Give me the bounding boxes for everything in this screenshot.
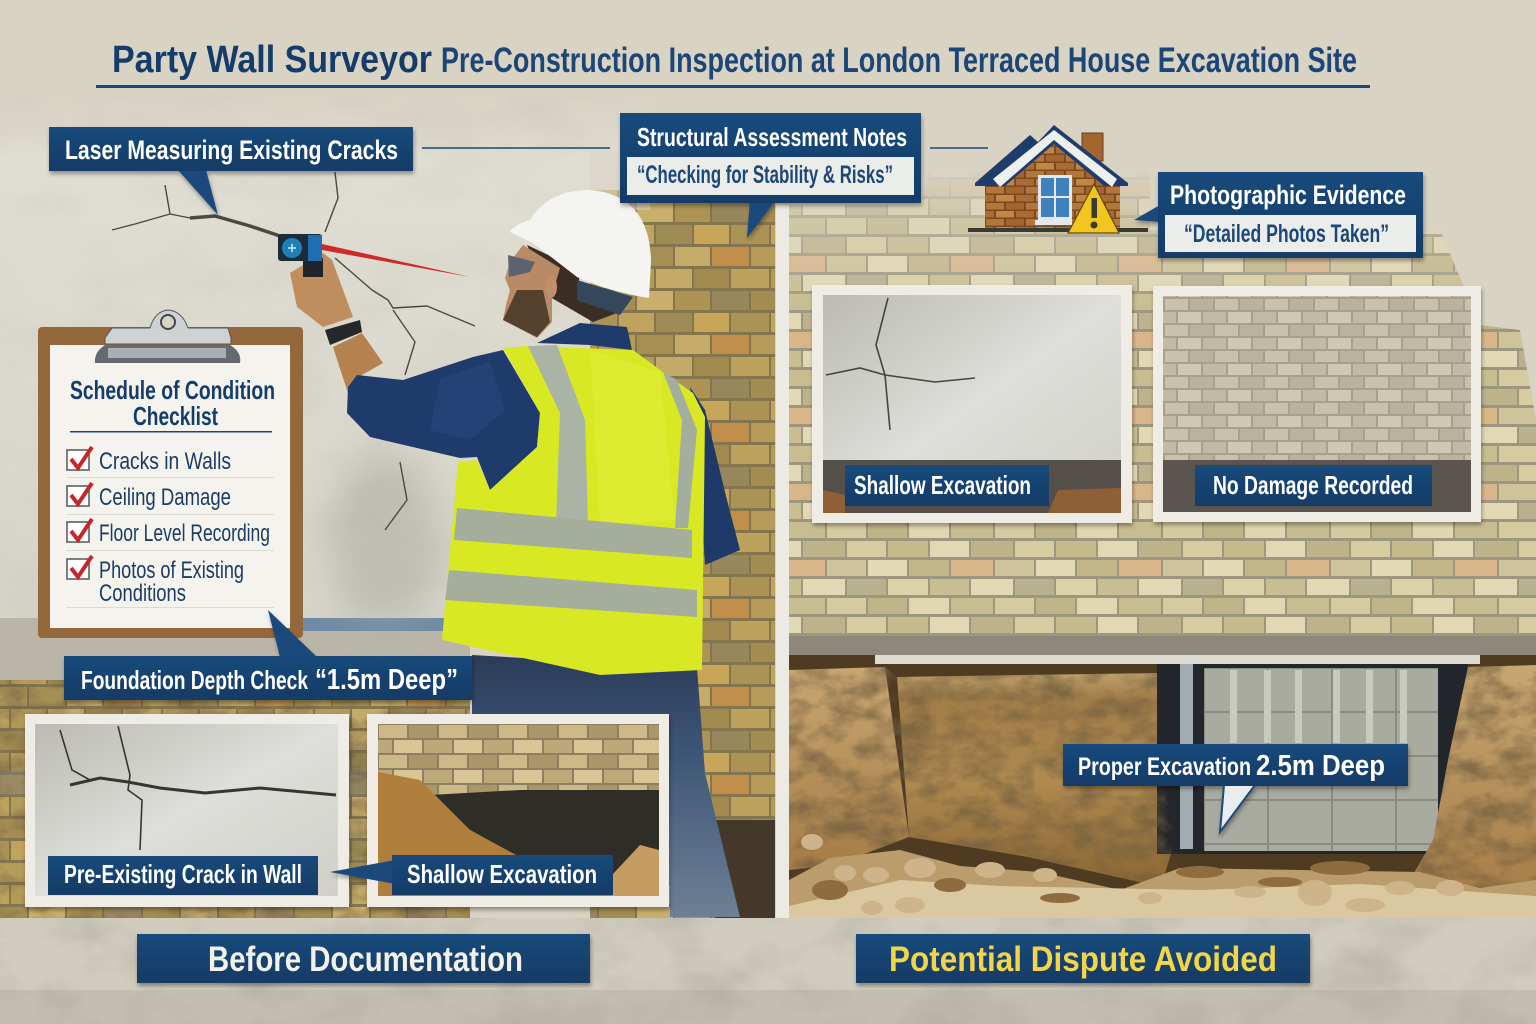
callout: photographic evidence: “Detailed Photos Taken” bbox=[1184, 220, 1389, 248]
icon: house with warning bbox=[968, 125, 1148, 233]
callout: photographic evidence bbox=[1134, 172, 1423, 258]
face bbox=[503, 245, 560, 338]
callout: laser measuring: Laser Measuring Existing Cracks bbox=[65, 135, 398, 165]
helmet strap bbox=[577, 280, 633, 315]
wall cracks bbox=[112, 172, 475, 530]
collar bbox=[537, 323, 632, 350]
checklist items: Floor Level Recording bbox=[99, 520, 270, 547]
label bbox=[1195, 465, 1432, 506]
glasses bbox=[508, 255, 535, 277]
callout: foundation depth bbox=[64, 610, 472, 700]
checklist heading: Checklist bbox=[133, 401, 218, 431]
callout: proper excavation: Proper Excavation bbox=[1078, 753, 1251, 781]
check marks bbox=[67, 447, 92, 579]
hi-vis vest bbox=[442, 345, 705, 675]
title: Party Wall Surveyor bbox=[112, 39, 432, 81]
beard bbox=[503, 290, 550, 337]
banner: before documentation: Before Documentation bbox=[208, 940, 523, 979]
label: Shallow Excavation bbox=[854, 470, 1031, 500]
callout: foundation depth: Foundation Depth Check bbox=[81, 665, 308, 695]
label: Pre-Existing Crack in Wall bbox=[64, 859, 302, 889]
checklist items: Cracks in Walls bbox=[99, 448, 231, 475]
watch bbox=[325, 320, 362, 345]
callout: laser measuring bbox=[49, 127, 413, 215]
callout: structural assessment: Structural Assessment Notes bbox=[637, 122, 907, 152]
ground strip bbox=[0, 918, 1536, 1024]
callout: proper excavation bbox=[1063, 744, 1408, 832]
photo: pre-existing crack bbox=[25, 714, 349, 907]
checklist heading bbox=[70, 375, 275, 431]
trousers bbox=[472, 655, 740, 917]
laser device bbox=[278, 234, 323, 277]
callout: structural assessment bbox=[620, 113, 921, 238]
sleeve folds bbox=[430, 362, 505, 440]
hair bbox=[527, 245, 617, 322]
photo: shallow excavation left bbox=[330, 714, 669, 907]
worker bbox=[278, 190, 740, 917]
checklist items: Photos of Existing bbox=[99, 557, 244, 584]
title bbox=[96, 39, 1370, 88]
ear bbox=[545, 276, 557, 298]
hard hat bbox=[510, 190, 651, 298]
banner: before documentation bbox=[137, 934, 590, 983]
label bbox=[330, 855, 613, 895]
checklist items bbox=[99, 448, 270, 607]
callout: structural assessment: “Checking for Stability & Risks” bbox=[637, 161, 893, 189]
label bbox=[845, 465, 1049, 506]
excavation pit bbox=[789, 655, 1536, 918]
photo: shallow excavation right bbox=[812, 285, 1132, 523]
checklist items: Conditions bbox=[99, 580, 186, 607]
clipboard checklist bbox=[38, 310, 303, 638]
label bbox=[48, 856, 318, 895]
sleeve bbox=[347, 350, 540, 490]
photo: no damage recorded bbox=[1153, 286, 1481, 522]
divider bbox=[776, 205, 789, 918]
callout: photographic evidence: Photographic Evidence bbox=[1170, 180, 1406, 210]
banner: potential dispute avoided: Potential Dispute Avoided bbox=[889, 940, 1277, 979]
checklist heading: Schedule of Condition bbox=[70, 375, 275, 405]
forearm bbox=[333, 333, 383, 393]
checklist items: Ceiling Damage bbox=[99, 484, 231, 511]
label: Shallow Excavation bbox=[407, 859, 597, 889]
label: No Damage Recorded bbox=[1213, 470, 1413, 500]
connector lines bbox=[422, 147, 988, 149]
back arm bbox=[690, 387, 740, 565]
callout: foundation depth: “1.5m Deep” bbox=[315, 664, 458, 696]
laser beam bbox=[322, 244, 470, 277]
callout: proper excavation: 2.5m Deep bbox=[1256, 750, 1385, 782]
metal clip bbox=[95, 310, 240, 363]
hand bbox=[290, 253, 353, 327]
